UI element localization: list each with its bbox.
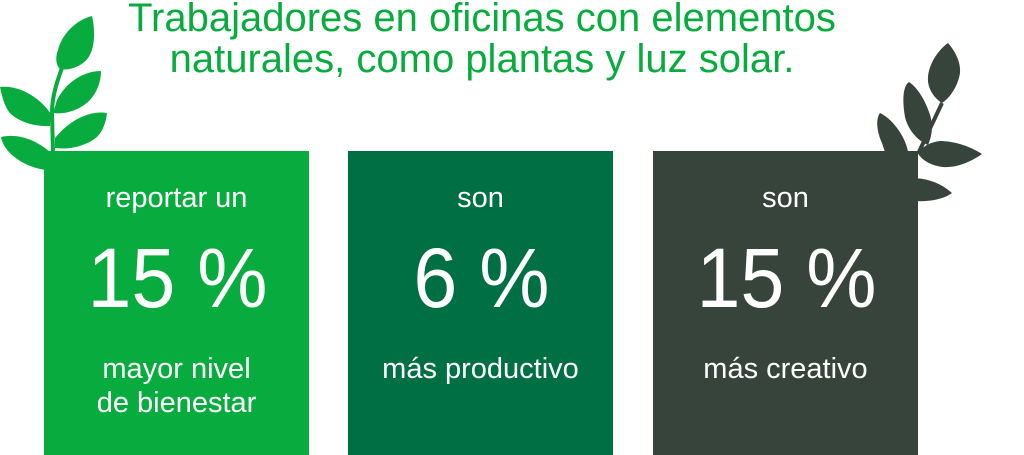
label: reportar un: reportar un (106, 182, 247, 214)
stat: 15 %: 15 % (87, 230, 268, 325)
icon: green plant (0, 16, 107, 170)
label: mayor nivel de bienestar (97, 353, 256, 419)
label: mayor nivel de bienestar: de bienestar (97, 387, 256, 419)
icon: dark plant (877, 43, 982, 202)
panel: creativo (653, 151, 918, 455)
stat: 6 %: 6 % (413, 230, 550, 325)
label: son: son (762, 182, 809, 214)
title: naturales, como plantas y luz solar. (170, 37, 794, 81)
stat: 15 %: 15 % (696, 230, 877, 325)
label: más creativo: más creativo (703, 353, 868, 385)
label: más productivo: más productivo (382, 353, 579, 385)
label: son: son (457, 182, 504, 214)
label: mayor nivel de bienestar: mayor nivel (102, 353, 251, 385)
panel: productivo (348, 151, 613, 455)
panel: bienestar (44, 151, 309, 455)
title (128, 0, 836, 81)
